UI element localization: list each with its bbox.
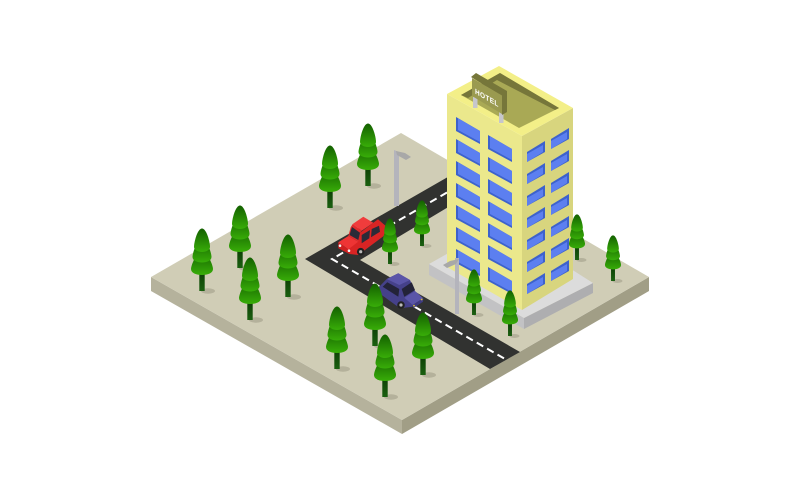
tree [412, 312, 436, 378]
road [305, 170, 520, 369]
panel: ground slab [151, 133, 649, 434]
left wall [447, 94, 522, 310]
icon: street lamp [443, 258, 459, 314]
tree [364, 284, 388, 349]
purple car [379, 273, 423, 309]
tree [414, 200, 431, 248]
platform [429, 224, 593, 329]
tree [191, 228, 215, 294]
hotel sign [471, 73, 507, 123]
right wall [522, 108, 573, 310]
windows right wall [527, 128, 569, 294]
tree [319, 146, 343, 211]
tree [229, 206, 253, 271]
tree [357, 124, 381, 189]
tree [239, 258, 263, 323]
tree [326, 306, 350, 372]
tree [502, 290, 519, 338]
hotel sign: HOTEL [475, 86, 499, 109]
roof [447, 66, 573, 136]
tree [569, 214, 586, 262]
red car [338, 217, 387, 256]
tree [382, 218, 399, 266]
icon: street lamp [394, 150, 411, 206]
tree [374, 334, 398, 400]
tree [605, 235, 622, 283]
windows left wall [456, 117, 512, 294]
tree [277, 234, 301, 300]
tree [466, 269, 483, 317]
hotel building [429, 66, 593, 329]
